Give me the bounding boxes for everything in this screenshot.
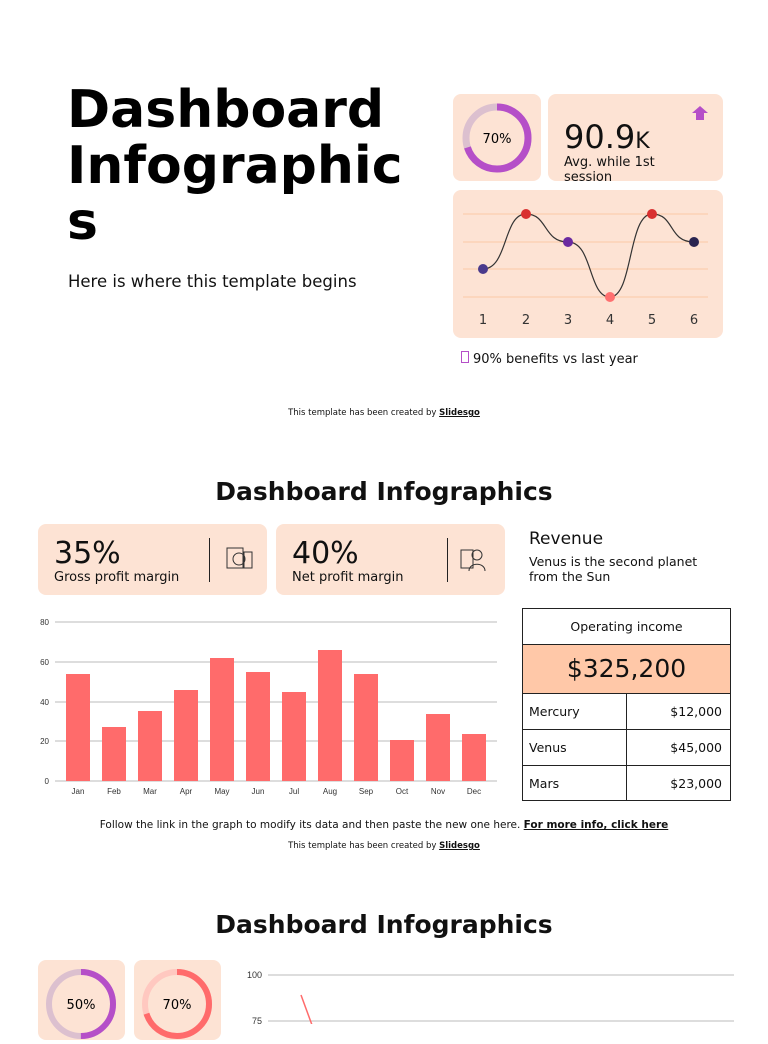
heading 2: Dashboard Infographics xyxy=(215,477,553,506)
revenue text xyxy=(529,529,697,584)
operating income table: Venus xyxy=(529,740,567,755)
bar chart: Jun xyxy=(252,787,264,796)
operating income table: $12,000 xyxy=(670,704,722,719)
bar chart: 80 xyxy=(40,618,50,627)
bar chart: Mar xyxy=(143,787,157,796)
line chart card: 3 xyxy=(564,313,572,328)
kpi card 40% xyxy=(276,524,505,595)
bar chart: Jul xyxy=(289,787,299,796)
operating income table: Mercury xyxy=(529,704,580,719)
bar chart: Aug xyxy=(323,787,337,796)
stat card 90.9K: 90.9K xyxy=(564,118,650,156)
icon: person xyxy=(460,550,486,571)
stat card 90.9K xyxy=(548,94,723,181)
bar chart: Apr xyxy=(180,787,193,796)
donut card 50% xyxy=(38,960,125,1040)
line chart card: 5 xyxy=(648,313,656,328)
operating income table: $45,000 xyxy=(670,740,722,755)
line chart card xyxy=(453,190,723,338)
line chart bottom xyxy=(247,970,734,1024)
credit 2: This template has been created by Slidesgo xyxy=(288,841,480,851)
bar chart: 60 xyxy=(40,658,50,667)
line chart card: 2 xyxy=(522,313,530,328)
donut card 50%: 50% xyxy=(67,998,95,1013)
line chart card: 1 xyxy=(479,313,487,328)
icon: worker xyxy=(226,548,252,568)
kpi card 35% xyxy=(38,524,267,595)
icon: up arrow xyxy=(692,106,708,120)
bar chart: Nov xyxy=(431,787,445,796)
stat card 90.9K: Avg. while 1st session xyxy=(564,155,655,185)
operating income table: $23,000 xyxy=(670,776,722,791)
bar chart: 40 xyxy=(40,698,50,707)
operating income table xyxy=(522,608,731,801)
operating income table: $325,200 xyxy=(567,654,686,683)
heading 3: Dashboard Infographics xyxy=(215,910,553,939)
kpi card 40%: 40% xyxy=(292,536,359,571)
subtitle: Here is where this template begins xyxy=(68,272,357,291)
operating income table: Mars xyxy=(529,776,559,791)
kpi card 35%: 35% xyxy=(54,536,121,571)
footnote link: Follow the link in the graph to modify its data and then paste the new one here. For more info, click here xyxy=(100,819,668,831)
line chart bottom: 100 xyxy=(247,970,262,980)
donut card 70%: 70% xyxy=(483,132,511,147)
bar chart: Feb xyxy=(107,787,121,796)
line chart card: 6 xyxy=(690,313,698,328)
bar chart: May xyxy=(214,787,230,796)
bar chart: Dec xyxy=(467,787,481,796)
kpi card 35%: Gross profit margin xyxy=(54,570,179,585)
bar chart: 0 xyxy=(45,777,50,786)
bar chart: Jan xyxy=(72,787,84,796)
revenue text: Venus is the second planet from the Sun xyxy=(529,554,697,584)
credit 1: This template has been created by Slidesgo xyxy=(288,408,480,418)
revenue text: Revenue xyxy=(529,529,603,549)
operating income table: Operating income xyxy=(570,619,683,634)
donut card 70% b: 70% xyxy=(163,998,191,1013)
bar chart: Oct xyxy=(396,787,409,796)
line chart card: 4 xyxy=(606,313,614,328)
bar chart xyxy=(40,618,497,796)
donut card 70% b xyxy=(134,960,221,1040)
bar chart: 20 xyxy=(40,737,50,746)
title: Dashboard Infographic s xyxy=(67,80,403,252)
kpi card 40%: Net profit margin xyxy=(292,570,403,585)
donut card 70% xyxy=(453,94,541,181)
benefits note: 90% benefits vs last year xyxy=(473,352,638,367)
bar chart: Sep xyxy=(359,787,374,796)
